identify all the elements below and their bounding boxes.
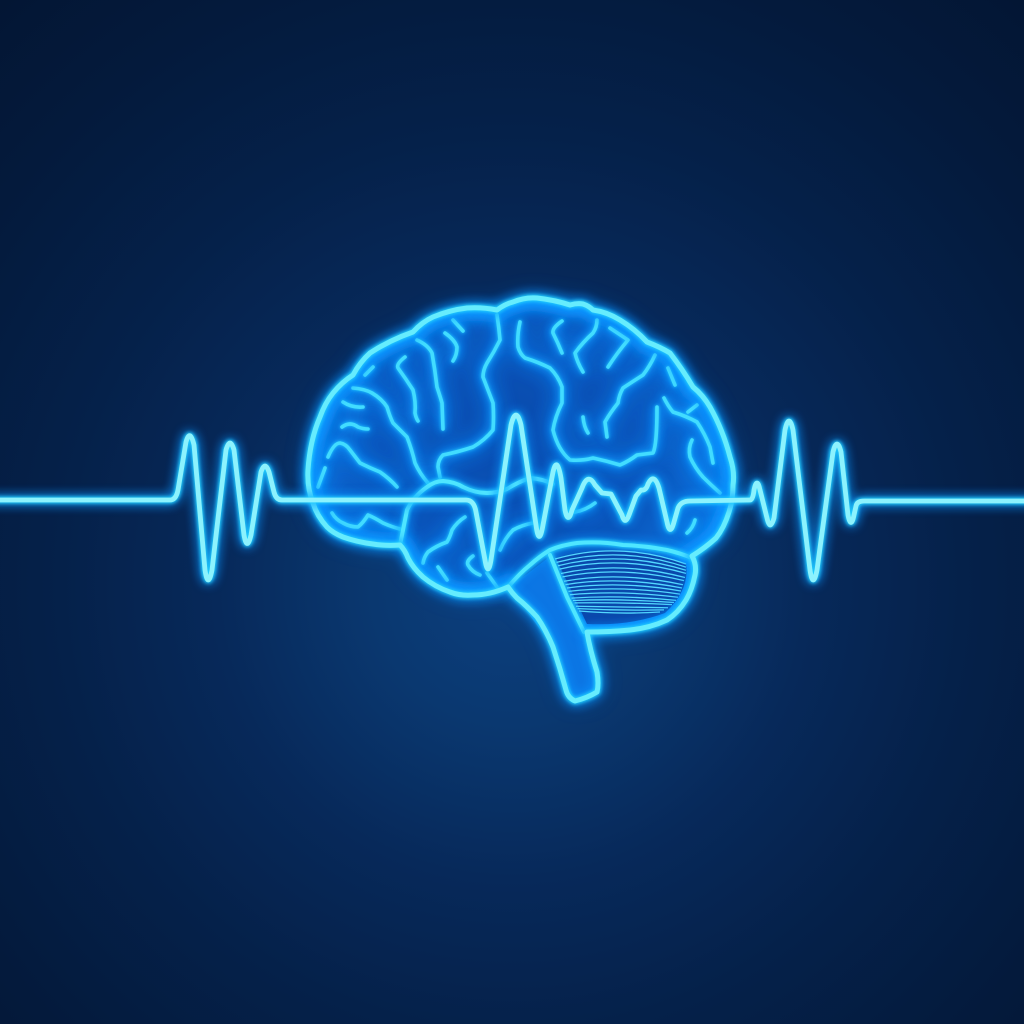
inner rim glow bbox=[308, 298, 734, 701]
brain fill bbox=[308, 298, 734, 701]
cerebellum fill bbox=[556, 550, 687, 624]
sulci bbox=[318, 315, 720, 587]
brain ambient glow bbox=[308, 298, 734, 701]
cerebellum folia lines bbox=[555, 551, 686, 613]
heartbeat line bbox=[0, 415, 1024, 580]
brain stem fill bbox=[510, 558, 597, 700]
lobe and stem boundary lines bbox=[400, 478, 692, 632]
brain outline bbox=[308, 298, 734, 701]
brain illustration bbox=[308, 298, 734, 701]
